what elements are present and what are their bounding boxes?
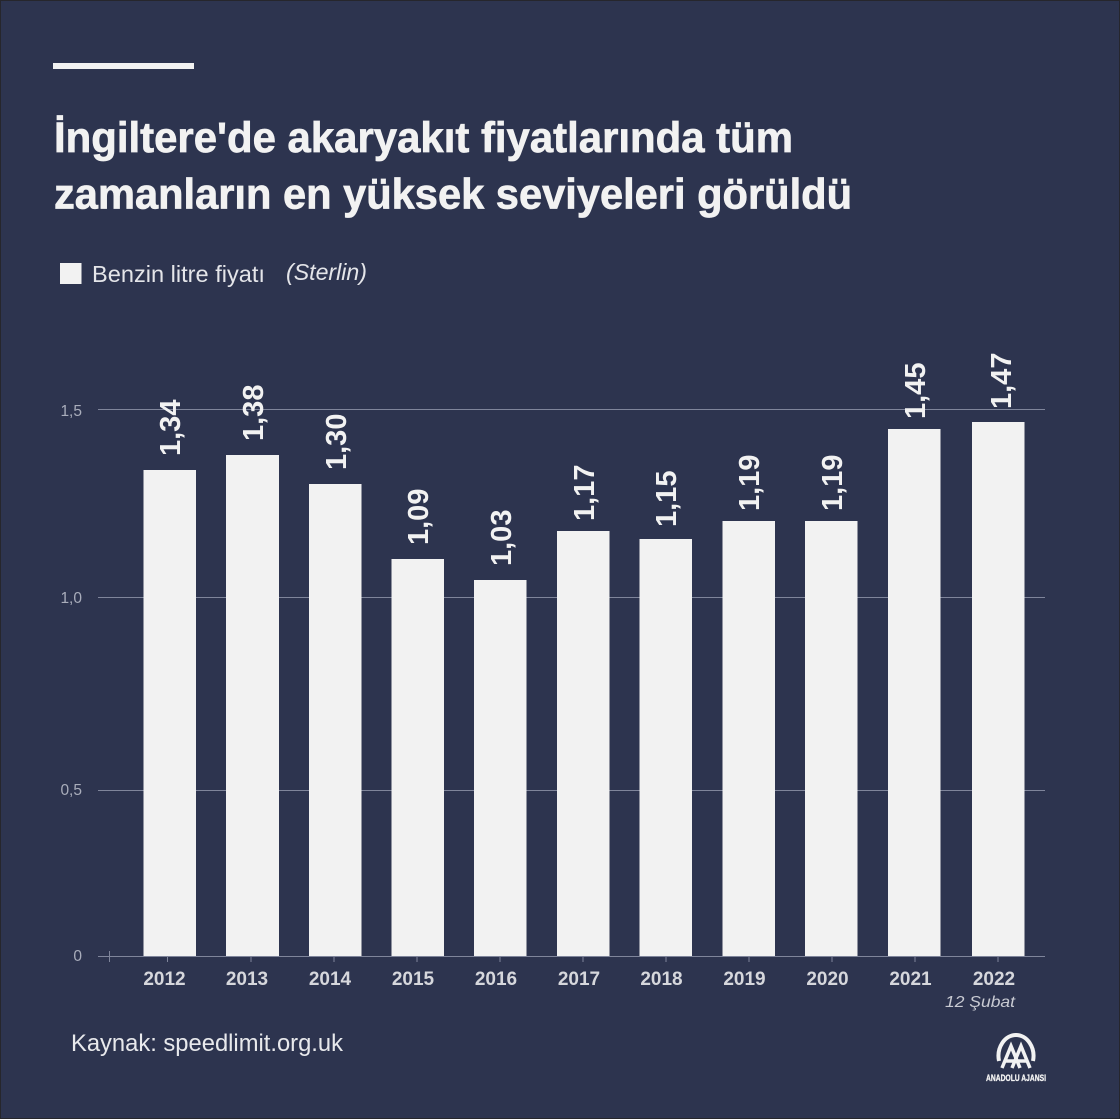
x axis [98, 951, 1045, 990]
title [54, 114, 852, 218]
y axis grid and labels: 0 [73, 948, 82, 965]
value labels: 1,17 [569, 465, 601, 521]
logo: Anadolu Ajansi [986, 1035, 1046, 1084]
legend [60, 259, 367, 287]
y axis grid and labels: 1,5 [60, 403, 82, 420]
y axis grid and labels: 1,0 [60, 590, 82, 607]
year labels: 2018 [640, 969, 683, 990]
bar chart: benzin litre fiyatı [144, 353, 1024, 957]
year labels: 2022 [973, 969, 1015, 990]
value labels: 1,34 [155, 400, 187, 456]
year labels [143, 969, 1015, 990]
y axis grid and labels [60, 403, 1045, 965]
y axis grid and labels: 0,5 [60, 782, 82, 799]
title: İngiltere'de akaryakıt fiyatlarında tüm [54, 114, 793, 162]
date note: 12 Şubat [945, 994, 1016, 1011]
value labels: 1,47 [986, 353, 1018, 409]
value labels: 1,09 [403, 489, 435, 545]
legend: (Sterlin) [286, 259, 367, 285]
value labels: 1,03 [486, 510, 518, 566]
value labels: 1,15 [651, 471, 683, 527]
year labels: 2021 [889, 969, 932, 990]
value labels: 1,19 [817, 455, 849, 511]
year labels: 2015 [392, 969, 435, 990]
year labels: 2012 [143, 969, 186, 990]
value labels: 1,30 [321, 414, 353, 470]
year labels: 2019 [723, 969, 766, 990]
top accent bar [53, 63, 194, 69]
year labels: 2017 [558, 969, 600, 990]
title: zamanların en yüksek seviyeleri görüldü [54, 170, 852, 218]
year labels: 2016 [475, 969, 517, 990]
bars [144, 422, 1024, 957]
legend: Benzin litre fiyatı [92, 261, 265, 287]
year labels: 2013 [226, 969, 268, 990]
logo: Anadolu Ajansi: ANADOLU AJANSI [986, 1073, 1046, 1084]
source: Kaynak: speedlimit.org.uk [71, 1030, 344, 1057]
year labels: 2020 [806, 969, 849, 990]
value labels: 1,38 [238, 385, 270, 441]
value labels [155, 353, 1018, 566]
year labels: 2014 [309, 969, 352, 990]
value labels: 1,45 [900, 363, 932, 419]
value labels: 1,19 [734, 455, 766, 511]
